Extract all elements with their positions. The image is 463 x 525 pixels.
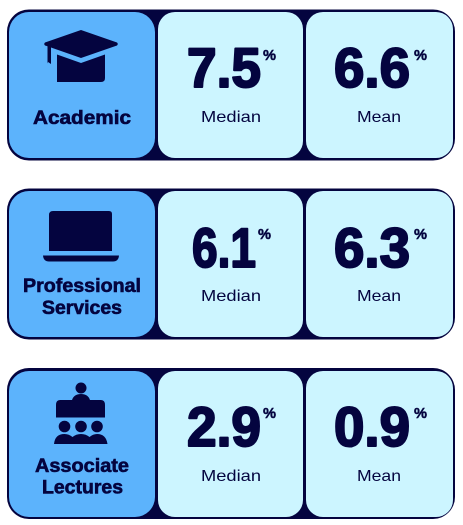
panel: Academic category bbox=[9, 12, 155, 158]
stat: 7.5 percent: 7.5 bbox=[187, 36, 261, 99]
stat: 6.3 percent: 6.3 bbox=[334, 216, 410, 279]
label: Median: Median bbox=[201, 468, 261, 485]
panel: Professional Services mean bbox=[306, 191, 453, 337]
percent sign: % bbox=[258, 226, 271, 243]
heading: Professional Services bbox=[23, 276, 141, 319]
heading: Academic: Academic bbox=[33, 108, 131, 129]
label: Mean: Mean bbox=[357, 468, 401, 485]
stat: 6.6 percent: 6.6 bbox=[334, 36, 410, 99]
icon: lecturer and audience bbox=[54, 382, 108, 444]
label: Median: Median bbox=[201, 288, 261, 305]
icon: graduation cap bbox=[44, 30, 118, 82]
stat: 6.1 percent: 6.1 bbox=[192, 216, 256, 279]
panel: Professional Services category bbox=[9, 191, 155, 337]
heading: Professional Services: Professional bbox=[23, 276, 141, 297]
heading: Associate Lectures bbox=[35, 456, 129, 498]
stat: 2.9 percent: 2.9 bbox=[187, 395, 261, 458]
percent sign: % bbox=[414, 47, 427, 64]
row background bbox=[7, 10, 455, 160]
percent sign: % bbox=[263, 405, 276, 422]
row: Professional Services bbox=[7, 188, 455, 340]
panel: Academic median bbox=[158, 12, 303, 158]
heading: Associate Lectures: Associate bbox=[35, 456, 129, 477]
icon: laptop bbox=[43, 211, 119, 262]
row background bbox=[7, 188, 455, 340]
row background bbox=[7, 368, 455, 519]
panel: Associate Lectures median bbox=[158, 371, 303, 517]
row: Associate Lectures bbox=[7, 368, 455, 519]
panel: Associate Lectures category bbox=[9, 371, 155, 517]
panel: Professional Services median bbox=[158, 191, 303, 337]
panel: Academic mean bbox=[306, 12, 453, 158]
stat: 0.9 percent: 0.9 bbox=[334, 395, 410, 458]
label: Median: Median bbox=[201, 109, 261, 126]
row: Academic bbox=[7, 10, 455, 160]
percent sign: % bbox=[263, 47, 276, 64]
heading: Associate Lectures: Lectures bbox=[42, 478, 123, 498]
label: Mean: Mean bbox=[357, 109, 401, 126]
panel: Associate Lectures mean bbox=[306, 371, 453, 517]
heading: Professional Services: Services bbox=[42, 298, 122, 319]
percent sign: % bbox=[414, 405, 427, 422]
percent sign: % bbox=[414, 226, 427, 243]
label: Mean: Mean bbox=[357, 288, 401, 305]
